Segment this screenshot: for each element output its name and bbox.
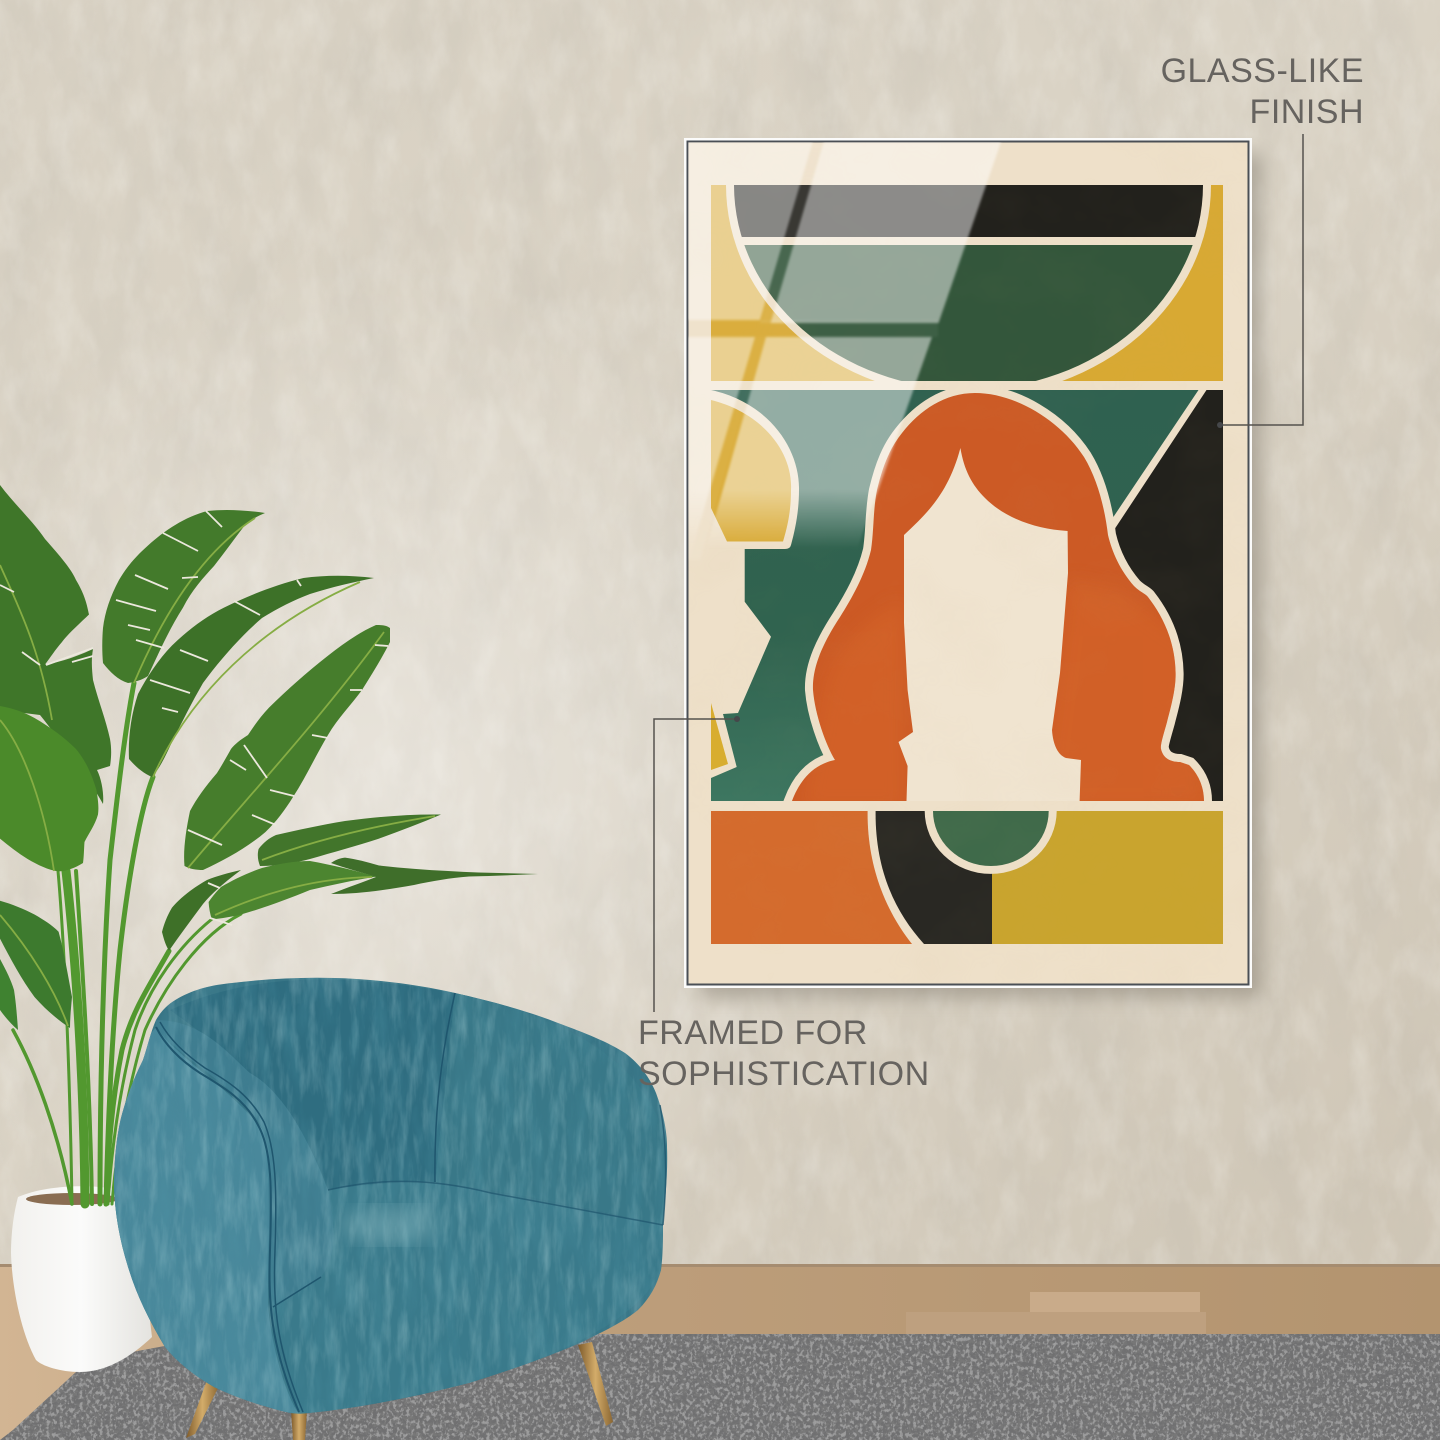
- leaf: long horizontal far right: [331, 858, 538, 894]
- callout: framed for sophistication: [638, 716, 930, 1093]
- pot: [11, 1186, 152, 1372]
- paper watercolor texture: [688, 142, 1248, 984]
- seat highlight: [340, 1207, 440, 1243]
- arm: [156, 1020, 334, 1307]
- stems: [13, 683, 241, 1204]
- leaf: horizontal upper: [258, 814, 441, 866]
- chair back shading: [170, 980, 455, 1190]
- leaf: long upper right: [129, 576, 374, 777]
- floor: [0, 1264, 1440, 1440]
- leaf: large right: [184, 625, 390, 870]
- frame: [684, 138, 1252, 988]
- middle section shapes: [711, 390, 1223, 810]
- chair legs: [186, 1342, 613, 1440]
- leaf slits: [0, 511, 388, 925]
- hair watercolor patch: [808, 622, 1204, 798]
- chair piping: [156, 993, 666, 1412]
- face: [898, 448, 1081, 801]
- hair: [792, 393, 1204, 801]
- cream left patch: [711, 390, 799, 778]
- leaf: upper centre: [102, 510, 265, 683]
- teal background: [711, 390, 1198, 801]
- small yellow triangle: [711, 703, 728, 770]
- bottom section: [711, 811, 1223, 944]
- black shape right: [1115, 390, 1223, 801]
- rug: [0, 1330, 1440, 1440]
- chair body: [100, 970, 680, 1420]
- armchair: [100, 970, 680, 1440]
- callout: framed for sophistication: FRAMED FOR: [638, 1014, 868, 1052]
- leaf: small lower left: [0, 959, 18, 1030]
- callout: glass-like finish: GLASS-LIKE: [1161, 52, 1364, 90]
- leaf: horizontal middle: [209, 861, 376, 920]
- callout: glass-like finish: FINISH: [1250, 93, 1364, 131]
- leaf: lower left: [0, 901, 72, 1028]
- framed poster: [684, 138, 1270, 1006]
- seat: [300, 1270, 661, 1414]
- callout: framed for sophistication: SOPHISTICATION: [638, 1055, 930, 1093]
- leaf: large upper left: [0, 485, 111, 804]
- plant: [0, 485, 538, 1372]
- leaf midribs: [0, 518, 435, 1026]
- top section: bowl: [711, 185, 1223, 381]
- soil: [26, 1193, 118, 1205]
- callout: glass-like finish: [1161, 52, 1364, 428]
- outer side: [100, 1027, 299, 1414]
- leaf: bright left: [0, 706, 98, 871]
- leaf: lower stalk: [162, 870, 241, 951]
- yellow dome left: [711, 400, 791, 542]
- glass reflections: [688, 142, 1001, 570]
